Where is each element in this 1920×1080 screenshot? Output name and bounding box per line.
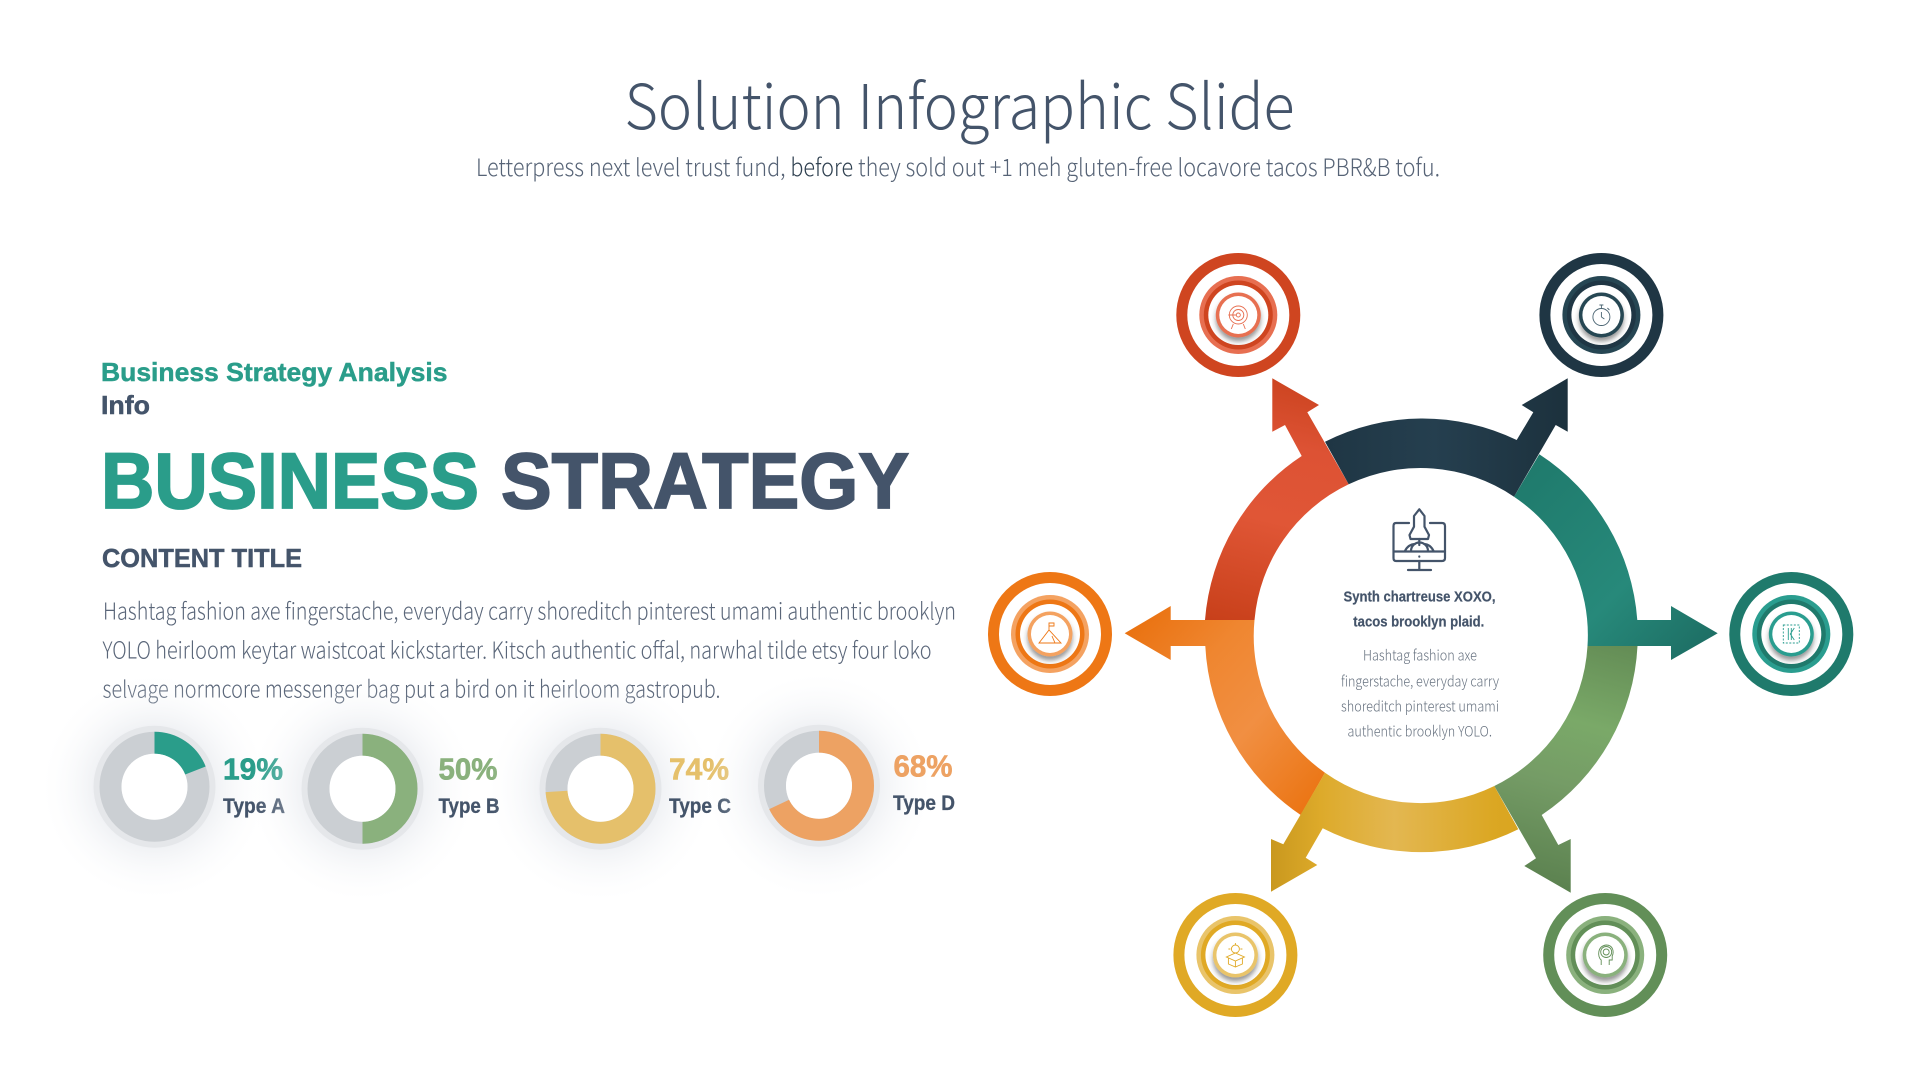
donut chart: Type D 68%: Type D: [893, 792, 955, 815]
target: navy with stopwatch icon: [1545, 258, 1658, 372]
section subheading: Info: Info: [101, 390, 150, 420]
body paragraph: [102, 592, 956, 704]
ring segment with arrow: orange: [1125, 606, 1325, 815]
donut chart: Type D 68%: 68%: [894, 748, 952, 784]
body paragraph: YOLO heirloom keytar waistcoat kickstarter. Kitsch authentic offal, narwhal tilde etsy four loko: [102, 632, 932, 666]
icon: open box with bulb: [1226, 943, 1244, 967]
center callout body: authentic brooklyn YOLO.: [1348, 720, 1492, 742]
center callout heading: [1344, 590, 1496, 631]
target: orange with mountain icon: [994, 578, 1106, 690]
donut chart: Type A 19%: 19%: [223, 752, 283, 786]
ring segment with arrow: red: [1205, 378, 1349, 620]
title: Solution Infographic Slide: [624, 57, 1294, 147]
section heading: Business Strategy Analysis: Business Strategy Analysis: [101, 357, 448, 387]
donut chart: Type C 74%: 74%: [669, 752, 729, 786]
center icon: rocket launching from monitor: [1394, 509, 1445, 570]
donut chart: Type A 19%: Type A: [223, 795, 285, 818]
donut chart: Type C 74%: [488, 677, 731, 901]
donut chart: Type B 50%: 50%: [438, 752, 498, 786]
body paragraph: selvage normcore messenger bag put a bird on it heirloom gastropub.: [102, 670, 720, 704]
main heading: BUSINESS STRATEGY: STRATEGY: [501, 436, 909, 525]
icon: data scan: [1783, 625, 1799, 643]
center callout body: [1341, 644, 1499, 742]
body paragraph: Hashtag fashion axe fingerstache, everyday carry shoreditch pinterest umami authentic brooklyn: [103, 592, 956, 626]
main heading: BUSINESS STRATEGY: BUSINESS: [101, 436, 479, 525]
ring segment with arrow: dark navy: [1325, 378, 1568, 497]
main heading: BUSINESS STRATEGY: [101, 436, 909, 525]
content title: CONTENT TITLE: [102, 543, 302, 573]
icon: stopwatch: [1593, 305, 1610, 326]
target: green with head icon: [1549, 898, 1662, 1012]
center callout heading: tacos brooklyn plaid.: [1353, 615, 1484, 631]
center callout body: Hashtag fashion axe: [1363, 644, 1477, 666]
center callout body: fingerstache, everyday carry: [1341, 670, 1499, 692]
target: red with dartboard icon: [1182, 258, 1295, 372]
subtitle: Letterpress next level trust fund, before they sold out +1 meh gluten-free locavore tacos PBR&B tofu.: [476, 148, 1440, 183]
icon: mountain with flag: [1039, 623, 1061, 643]
donut chart: Type B 50%: Type B: [438, 795, 500, 818]
donut chart: Type C 74%: Type C: [669, 795, 731, 818]
donut chart: Type D 68%: [707, 674, 955, 898]
ring segment with arrow: green: [1494, 646, 1638, 893]
donut chart: Type B 50%: [250, 677, 500, 901]
icon: dartboard: [1228, 306, 1247, 329]
donut chart: Type A 19%: [42, 675, 285, 899]
icon: head with brain: [1599, 945, 1613, 965]
center callout body: shoreditch pinterest umami: [1341, 696, 1499, 716]
ring segment with arrow: yellow: [1271, 773, 1518, 892]
target: teal with data icon: [1735, 578, 1848, 690]
center callout heading: Synth chartreuse XOXO,: [1344, 590, 1496, 606]
ring segment with arrow: teal: [1514, 454, 1718, 660]
target: yellow with box icon: [1179, 898, 1292, 1012]
